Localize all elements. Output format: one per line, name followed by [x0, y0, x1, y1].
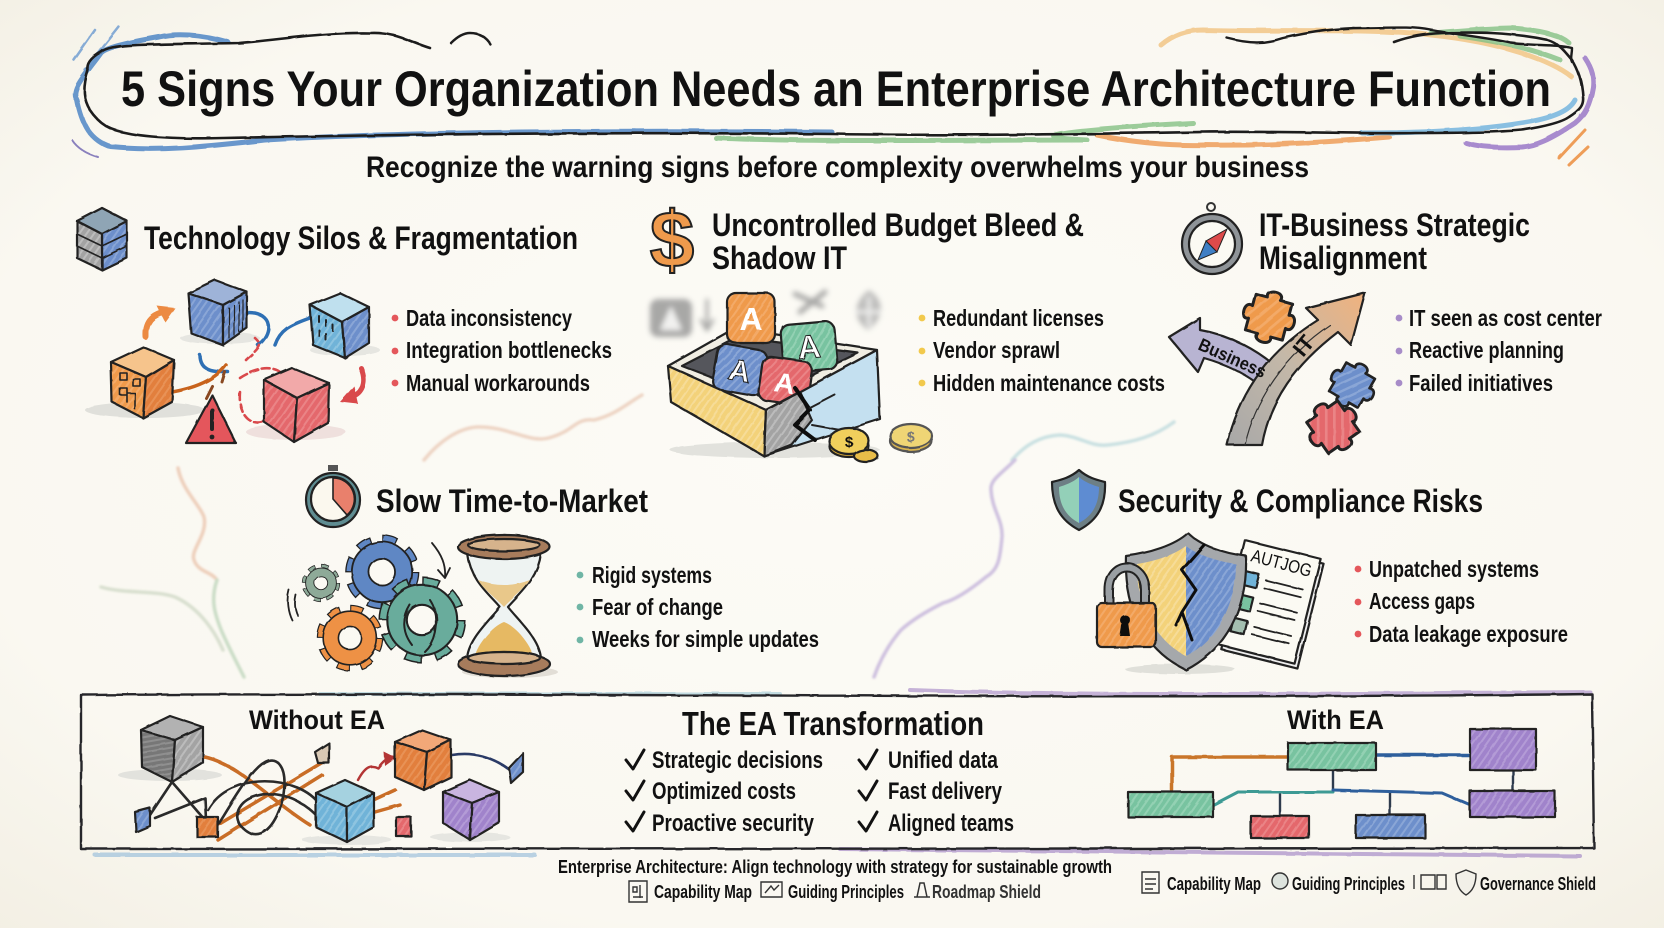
- icon: dollar sign: $: [650, 195, 694, 284]
- heading: the EA transformation: The EA Transformation: [682, 705, 984, 742]
- subtitle: Recognize the warning signs before complexity overwhelms your business: [366, 151, 1309, 184]
- checklist: Aligned teams: [888, 810, 1014, 837]
- bullet list: Rigid systems: [592, 562, 712, 588]
- checklist: [626, 747, 1014, 837]
- icon: stopwatch: [306, 465, 360, 527]
- heading: Security & Compliance Risks: [1118, 483, 1483, 519]
- footer statement: Enterprise Architecture: Align technology with strategy for sustainable growth: [558, 857, 1112, 877]
- bullet list: Access gaps: [1369, 588, 1475, 614]
- heading: Uncontrolled Budget Bleed &: [712, 207, 1084, 243]
- illustration: box of shadow apps: A: [796, 328, 822, 366]
- icon: roadmap: [914, 883, 930, 897]
- icon: guiding principles: [761, 882, 782, 897]
- icon: roadmap glyph: [1414, 875, 1446, 889]
- icon: server tower: [77, 208, 127, 270]
- bullet list: Redundant licenses: [933, 305, 1104, 331]
- icon: shield: [1052, 470, 1105, 530]
- bullet list: [392, 305, 612, 396]
- panel: budget bleed: [650, 195, 1165, 462]
- footer legend: centre: Capability Map: [654, 882, 752, 902]
- heading: without EA: Without EA: [249, 705, 385, 735]
- heading: Slow Time-to-Market: [376, 483, 648, 519]
- illustration: box of shadow apps: $: [907, 429, 916, 446]
- illustration: box of shadow apps: A: [773, 367, 797, 400]
- illustration: box of shadow apps: $: [845, 434, 854, 451]
- icon: capability map: [629, 881, 647, 902]
- bullet list: IT seen as cost center: [1409, 305, 1602, 331]
- bullet list: [577, 562, 819, 652]
- bullet list: Reactive planning: [1409, 337, 1564, 363]
- bullet list: Data inconsistency: [406, 305, 572, 331]
- panel: strategic misalignment: [1169, 203, 1602, 463]
- bullet list: Integration bottlenecks: [406, 337, 612, 363]
- checklist: Optimized costs: [652, 778, 796, 805]
- document label: AUTJOG: [1249, 546, 1314, 581]
- panel: security and compliance: [1052, 470, 1568, 674]
- bullet list: Manual workarounds: [406, 370, 590, 396]
- heading: Shadow IT: [712, 240, 847, 276]
- bullet list: Failed initiatives: [1409, 370, 1553, 396]
- footer legend: right: Governance Shield: [1480, 874, 1596, 894]
- illustration: gears and hourglass: [288, 535, 558, 678]
- panel: technology silos: [77, 208, 612, 443]
- bullet list: Data leakage exposure: [1369, 621, 1568, 647]
- bullet list: [1396, 305, 1602, 396]
- bullet list: Unpatched systems: [1369, 556, 1539, 582]
- heading: Misalignment: [1259, 240, 1427, 276]
- illustration: disconnected silos: [85, 280, 380, 443]
- heading: IT-Business Strategic: [1259, 207, 1530, 243]
- icon: governance shield: [1456, 870, 1476, 895]
- footer legend: right: [1142, 870, 1596, 895]
- checklist: Fast delivery: [888, 778, 1003, 805]
- panel: EA transformation comparison: [81, 690, 1594, 856]
- heading: with EA: With EA: [1287, 705, 1384, 735]
- bullet list: Vendor sprawl: [933, 337, 1060, 363]
- footer legend: right: Guiding Principles: [1292, 874, 1405, 894]
- bullet list: [1355, 556, 1568, 647]
- footer legend: centre: Guiding Principles: [788, 882, 904, 902]
- icon: document: [1142, 872, 1159, 893]
- illustration: diverging arrows: [1169, 285, 1384, 463]
- checklist: Proactive security: [652, 810, 815, 837]
- footer legend: centre: Roadmap Shield: [932, 882, 1041, 902]
- title frame: hand-drawn scribble: [72, 27, 1593, 165]
- footer legend: centre: [629, 881, 1041, 902]
- panel: slow time to market: [288, 465, 819, 678]
- footer legend: right: Capability Map: [1167, 874, 1261, 894]
- heading: Technology Silos & Fragmentation: [144, 220, 578, 256]
- illustration: box of shadow apps: A: [726, 353, 753, 390]
- icon: globe: [1272, 873, 1288, 889]
- bullet list: Hidden maintenance costs: [933, 370, 1165, 396]
- decorative wisps: [101, 395, 1174, 677]
- diagram: organised architecture: [1128, 729, 1555, 838]
- bullet list: Weeks for simple updates: [592, 626, 819, 652]
- illustration: tangled systems: [118, 716, 523, 845]
- illustration: cracked shield, padlock and audit report: [1097, 533, 1325, 674]
- box frame: [81, 690, 1594, 856]
- bullet list: [919, 305, 1165, 396]
- checklist: Unified data: [888, 747, 999, 774]
- checklist: Strategic decisions: [652, 747, 823, 774]
- arrow label: IT: IT: [1288, 330, 1320, 361]
- icon: compass: [1182, 203, 1242, 274]
- arrow label: Business: Business: [1195, 334, 1269, 382]
- bullet list: Fear of change: [592, 594, 723, 620]
- illustration: box of shadow apps: [650, 290, 932, 462]
- illustration: box of shadow apps: A: [739, 301, 763, 337]
